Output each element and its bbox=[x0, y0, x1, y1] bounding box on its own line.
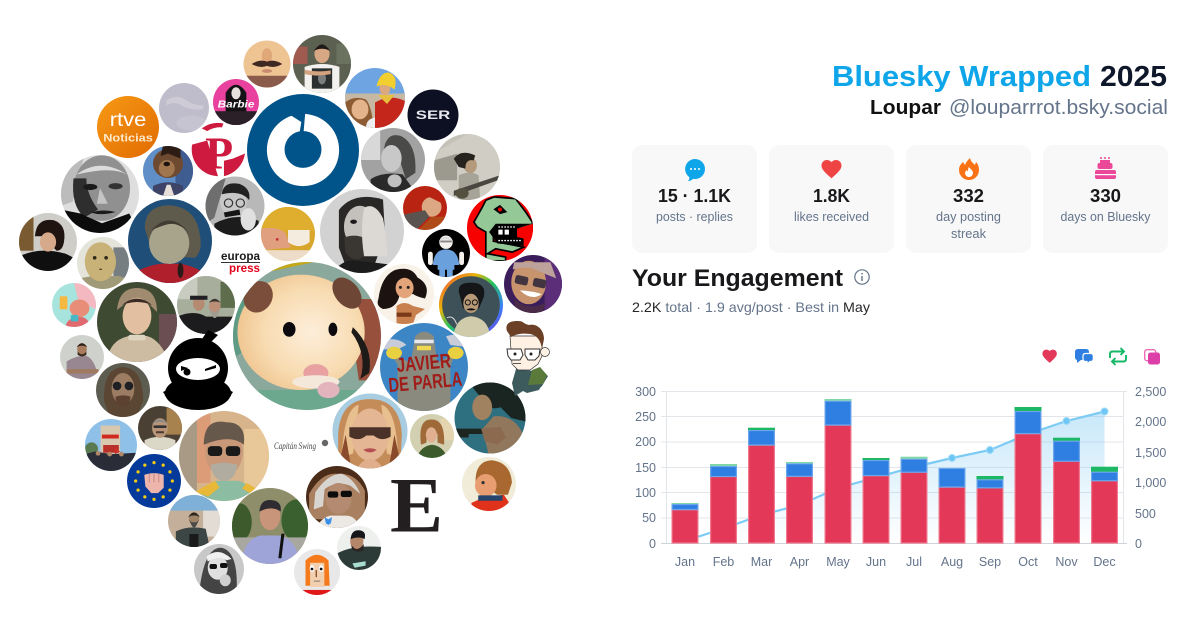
panel: avatar bubble cluster bbox=[19, 35, 562, 595]
avatar: woman black and white bbox=[361, 128, 425, 192]
avatar: hamster bbox=[233, 262, 381, 410]
chart: monthly engagement bbox=[635, 385, 1166, 569]
left axis labels bbox=[635, 385, 656, 551]
chart grid bbox=[661, 391, 1127, 544]
avatar: grey foggy sky bbox=[159, 83, 209, 133]
month labels: Jun bbox=[866, 555, 886, 569]
left axis labels: 250 bbox=[635, 410, 656, 424]
avatar: SER logo: SER bbox=[416, 108, 450, 122]
panel: days on Bluesky card: 330 bbox=[1090, 186, 1121, 206]
logo: europa press: press bbox=[229, 261, 260, 275]
icon: birthday cake bbox=[1095, 157, 1116, 179]
logo: europa press: europa bbox=[221, 249, 260, 263]
avatar: long-haired rocker bbox=[410, 414, 454, 458]
month labels: May bbox=[826, 555, 851, 569]
avatar: man in blue shirt bbox=[227, 488, 312, 564]
left axis labels: 0 bbox=[649, 537, 656, 551]
avatar: man with sunglasses at street bbox=[179, 411, 269, 501]
avatar: man with round sunglasses and long hair bbox=[96, 363, 150, 417]
panel: likes card: 1.8K bbox=[813, 186, 850, 206]
avatar: black and white portrait of older man bbox=[61, 155, 139, 233]
avatar: rtve Noticias logo: rtve bbox=[110, 110, 146, 131]
icon: legend replies bbox=[1075, 349, 1093, 364]
avatar: man in sunglasses with nun veil bbox=[306, 466, 368, 528]
month labels: Jul bbox=[906, 555, 922, 569]
month labels bbox=[675, 555, 1116, 569]
logo: Capitán Swing: Capitán Swing bbox=[274, 441, 316, 451]
avatar: Jane Austen style portrait bbox=[97, 282, 177, 362]
user name and handle: Loupar bbox=[870, 97, 941, 119]
avatar: Javier de Parla mummy cartoon: JAVIER bbox=[396, 350, 452, 377]
avatar: EU flag with fist bbox=[127, 454, 181, 508]
right axis labels: 2,500 bbox=[1135, 385, 1166, 399]
left axis labels: 200 bbox=[635, 435, 656, 449]
right axis labels: 1,500 bbox=[1135, 446, 1166, 460]
avatar: Barbie parody: Barbie bbox=[218, 100, 255, 111]
avatar: pixel dinosaur bbox=[467, 195, 533, 261]
avatar: man with blue butterfly bbox=[337, 526, 381, 570]
avatar: cartoon girl with dark curly hair bbox=[374, 264, 434, 324]
month labels: Apr bbox=[790, 555, 809, 569]
avatar: Barbie parody bbox=[213, 79, 259, 125]
icon: heart bbox=[822, 160, 842, 178]
avatar: man covering half his face bbox=[320, 189, 404, 273]
panel: days on Bluesky card bbox=[1043, 145, 1168, 253]
panel: days on Bluesky card: days on Bluesky bbox=[1060, 210, 1151, 224]
panel: streak card: 332 bbox=[953, 186, 984, 206]
avatar: red P logo: P bbox=[205, 127, 233, 178]
panel: posts and replies card: 15 · 1.1K bbox=[658, 186, 731, 206]
month labels: Sep bbox=[979, 555, 1001, 569]
heading: Your Engagement: Your Engagement bbox=[632, 265, 843, 292]
avatar: blue ring logo bbox=[247, 94, 359, 206]
user name and handle: @louparrrot.bsky.social bbox=[949, 97, 1168, 119]
avatar: Groucho Marx bbox=[206, 176, 264, 236]
logo: El Español E bbox=[370, 460, 462, 552]
avatar: woman playing guitar bbox=[434, 134, 500, 200]
panel: streak card: streak bbox=[951, 227, 987, 241]
left axis labels: 300 bbox=[635, 385, 656, 399]
month labels: Mar bbox=[751, 555, 772, 569]
avatar: SER logo bbox=[408, 90, 458, 140]
red likes bars bbox=[672, 425, 1117, 543]
blue replies bars bbox=[672, 401, 1117, 510]
right axis labels: 1,000 bbox=[1135, 476, 1166, 490]
avatar: moustache close-up bbox=[244, 40, 290, 88]
logo: europa press bbox=[221, 249, 260, 275]
avatar: doctor cartoon bbox=[422, 229, 470, 277]
avatar: cartoon man with glasses bbox=[506, 321, 550, 396]
avatar: painting of a girl bbox=[128, 199, 212, 283]
avatar: red P logo bbox=[191, 123, 245, 178]
panel: streak card: day posting bbox=[936, 210, 1001, 224]
avatar: rtve Noticias logo: Noticias bbox=[103, 133, 153, 145]
avatar: bearded man with city bbox=[168, 495, 220, 547]
panel: likes card: likes received bbox=[794, 210, 869, 224]
green reposts bars bbox=[672, 399, 1118, 504]
right axis labels: 2,000 bbox=[1135, 415, 1166, 429]
icon: legend heart bbox=[1042, 350, 1057, 363]
user name and handle bbox=[870, 97, 1168, 119]
avatar: Javier de Parla mummy cartoon bbox=[380, 323, 468, 411]
panel: streak card bbox=[906, 145, 1031, 253]
avatar: Javier de Parla mummy cartoon: DE PARLA bbox=[388, 369, 463, 397]
title: 2025 bbox=[1100, 61, 1167, 93]
panel: likes card bbox=[769, 145, 894, 253]
month labels: Dec bbox=[1093, 555, 1116, 569]
month labels: Oct bbox=[1018, 555, 1038, 569]
avatar: dog head on person bbox=[143, 146, 193, 196]
left axis labels: 100 bbox=[635, 486, 656, 500]
month labels: Jan bbox=[675, 555, 695, 569]
avatar: portrait with rainbow ring bbox=[439, 273, 503, 337]
month labels: Aug bbox=[941, 555, 963, 569]
avatar: rtve Noticias logo bbox=[97, 96, 159, 158]
avatar: cartoon otter selfie bbox=[52, 283, 96, 327]
avatar: orange-haired cartoon bbox=[294, 549, 340, 595]
cumulative area bbox=[685, 412, 1104, 543]
icon: legend quotes bbox=[1145, 350, 1160, 364]
avatar: woman with dark curly hair bbox=[19, 213, 77, 271]
avatar: two men with hat and beard bbox=[177, 276, 235, 334]
avatar: older man with glasses selfie bbox=[138, 406, 182, 450]
avatar: black and white woman with sunglasses bbox=[194, 544, 244, 594]
icon: flame bbox=[959, 158, 979, 180]
avatar: boy in checked shirt bbox=[462, 457, 516, 511]
panel: posts and replies card bbox=[632, 145, 757, 253]
icon: chat bubble bbox=[685, 159, 705, 181]
logo: El Español E: E bbox=[390, 462, 443, 548]
left axis labels: 50 bbox=[642, 511, 656, 525]
chart legend icons bbox=[1042, 348, 1160, 365]
avatar: person with toy gun on red bbox=[403, 186, 447, 230]
avatar: protest with placard bbox=[85, 419, 137, 471]
avatar: illustrated blonde with sunglasses bbox=[332, 394, 408, 468]
avatar: potato head bbox=[77, 237, 129, 289]
left axis labels: 150 bbox=[635, 461, 656, 475]
panel: posts and replies card: posts · replies bbox=[656, 210, 733, 224]
month labels: Feb bbox=[713, 555, 734, 569]
avatar: ninja icon bbox=[163, 330, 233, 410]
right axis labels bbox=[1135, 385, 1166, 551]
icon: info bbox=[855, 270, 869, 284]
avatar: tea cup and hands bbox=[261, 207, 315, 261]
cumulative line bbox=[685, 408, 1108, 541]
avatar: pulp illustration woman with gun bbox=[454, 382, 526, 454]
month labels: Nov bbox=[1055, 555, 1078, 569]
title: Bluesky Wrapped bbox=[832, 61, 1091, 93]
engagement summary: 2.2K total · 1.9 avg/post · Best in May bbox=[632, 299, 870, 315]
right axis labels: 500 bbox=[1135, 507, 1156, 521]
icon: legend reposts bbox=[1110, 348, 1126, 365]
avatar: couple with yellow hat bbox=[345, 68, 405, 128]
avatar: smiling bald man with glasses bbox=[504, 255, 562, 313]
avatar: man in patterned shirt bbox=[60, 335, 104, 379]
right axis labels: 0 bbox=[1135, 537, 1142, 551]
avatar: man holding a book bbox=[293, 35, 351, 93]
